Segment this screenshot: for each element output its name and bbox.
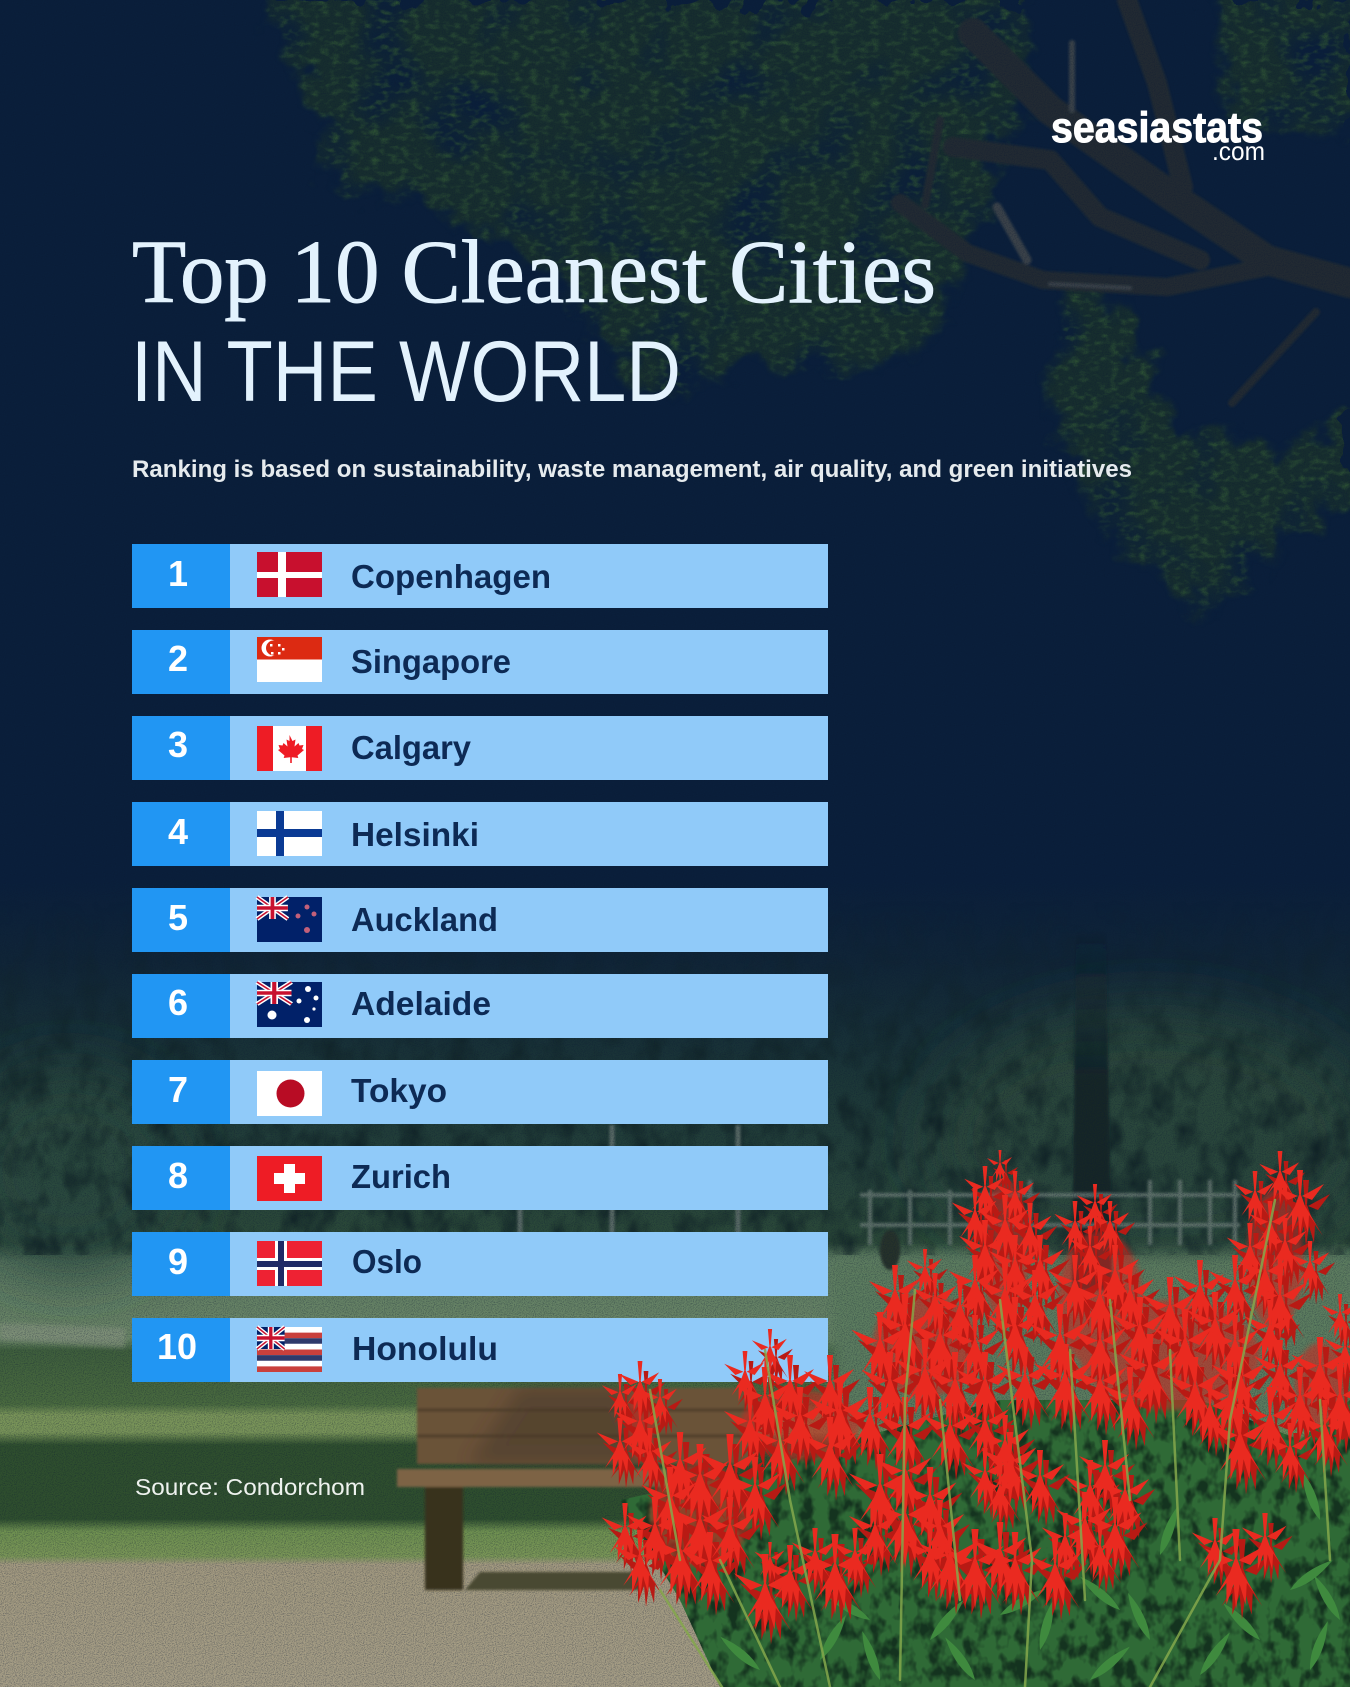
- flowering red plant: [597, 1150, 1350, 1687]
- source note: Source: Condorchom: [135, 1474, 365, 1500]
- city name: Zurich: Zurich: [351, 1158, 451, 1195]
- flag: New Zealand: [257, 897, 322, 942]
- flag: Hawaii: [257, 1327, 322, 1372]
- rank cell 10: [132, 1318, 230, 1382]
- rank cell 5: [132, 888, 230, 952]
- flag: Norway: [257, 1241, 322, 1286]
- flag: Canada: [257, 726, 322, 771]
- rank cell 9: 9: [168, 1241, 188, 1282]
- flag: Australia: [257, 982, 322, 1027]
- city name: Tokyo: Tokyo: [351, 1072, 447, 1109]
- city name: Singapore: Singapore: [351, 643, 511, 680]
- rank cell 7: [132, 1060, 230, 1124]
- city name: Calgary: Calgary: [351, 729, 472, 766]
- rank cell 3: 3: [168, 724, 188, 765]
- logo: seasiastats.com: seasiastats: [1051, 104, 1263, 152]
- row 9: Oslo: [132, 1232, 828, 1296]
- ranked list of cities: [132, 544, 828, 1382]
- city name: Honolulu: Honolulu: [352, 1330, 498, 1367]
- title: Top 10 Cleanest Cities: Top 10 Cleanest Cities: [132, 223, 936, 322]
- city name: Auckland: Auckland: [351, 901, 498, 938]
- city name: Helsinki: Helsinki: [351, 816, 479, 853]
- rank cell 3: [132, 716, 230, 780]
- rank cell 5: 5: [168, 897, 188, 938]
- row 4: Helsinki: [132, 802, 828, 866]
- red blossoms: shadow layer: [603, 1160, 1350, 1644]
- row 5: Auckland: [132, 888, 828, 952]
- subtitle: IN THE WORLD: IN THE WORLD: [131, 324, 681, 420]
- row 3: Calgary: [132, 716, 828, 780]
- row 10: Honolulu: [132, 1318, 828, 1382]
- rank cell 4: 4: [168, 811, 188, 852]
- rank cell 10: 10: [157, 1326, 197, 1367]
- stems: [650, 1200, 1330, 1687]
- row 7: Tokyo: [132, 1060, 828, 1124]
- rank cell 8: 8: [168, 1155, 188, 1196]
- tree foliage and branches: [266, 0, 1350, 618]
- row 2: Singapore: [132, 630, 828, 694]
- flag: Denmark: [257, 552, 322, 597]
- logo: seasiastats.com: .com: [1212, 136, 1265, 166]
- row 6: Adelaide: [132, 974, 828, 1038]
- leaves: [717, 1470, 1344, 1683]
- row 1: Copenhagen: [132, 544, 828, 608]
- green foliage body: [620, 1400, 1350, 1687]
- city name: Adelaide: Adelaide: [351, 985, 491, 1022]
- rank cell 6: 6: [168, 982, 188, 1023]
- rank cell 6: [132, 974, 230, 1038]
- flag: Japan: [257, 1071, 322, 1116]
- city name: Oslo: Oslo: [352, 1243, 422, 1280]
- rank cell 2: [132, 630, 230, 694]
- rank cell 2: 2: [168, 638, 188, 679]
- city name: Copenhagen: Copenhagen: [351, 558, 551, 595]
- park bench: [397, 1388, 760, 1590]
- background photo: park at night: [0, 938, 1350, 1687]
- rank cell 1: 1: [168, 553, 188, 594]
- description: ranking basis: Ranking is based on sustainability, waste management, air quality, and green initiatives: [132, 456, 1132, 483]
- rank cell 8: [132, 1146, 230, 1210]
- row 8: Zurich: [132, 1146, 828, 1210]
- rank cell 9: [132, 1232, 230, 1296]
- red fill beneath blossoms: [626, 1180, 1345, 1567]
- rank cell 1: [132, 544, 230, 608]
- flag: Switzerland: [257, 1156, 322, 1201]
- flag: Finland: [257, 811, 322, 856]
- rank cell 4: [132, 802, 230, 866]
- rank cell 7: 7: [168, 1069, 188, 1110]
- red blossoms: bright layer: [597, 1150, 1350, 1634]
- flag: Singapore: [257, 637, 322, 682]
